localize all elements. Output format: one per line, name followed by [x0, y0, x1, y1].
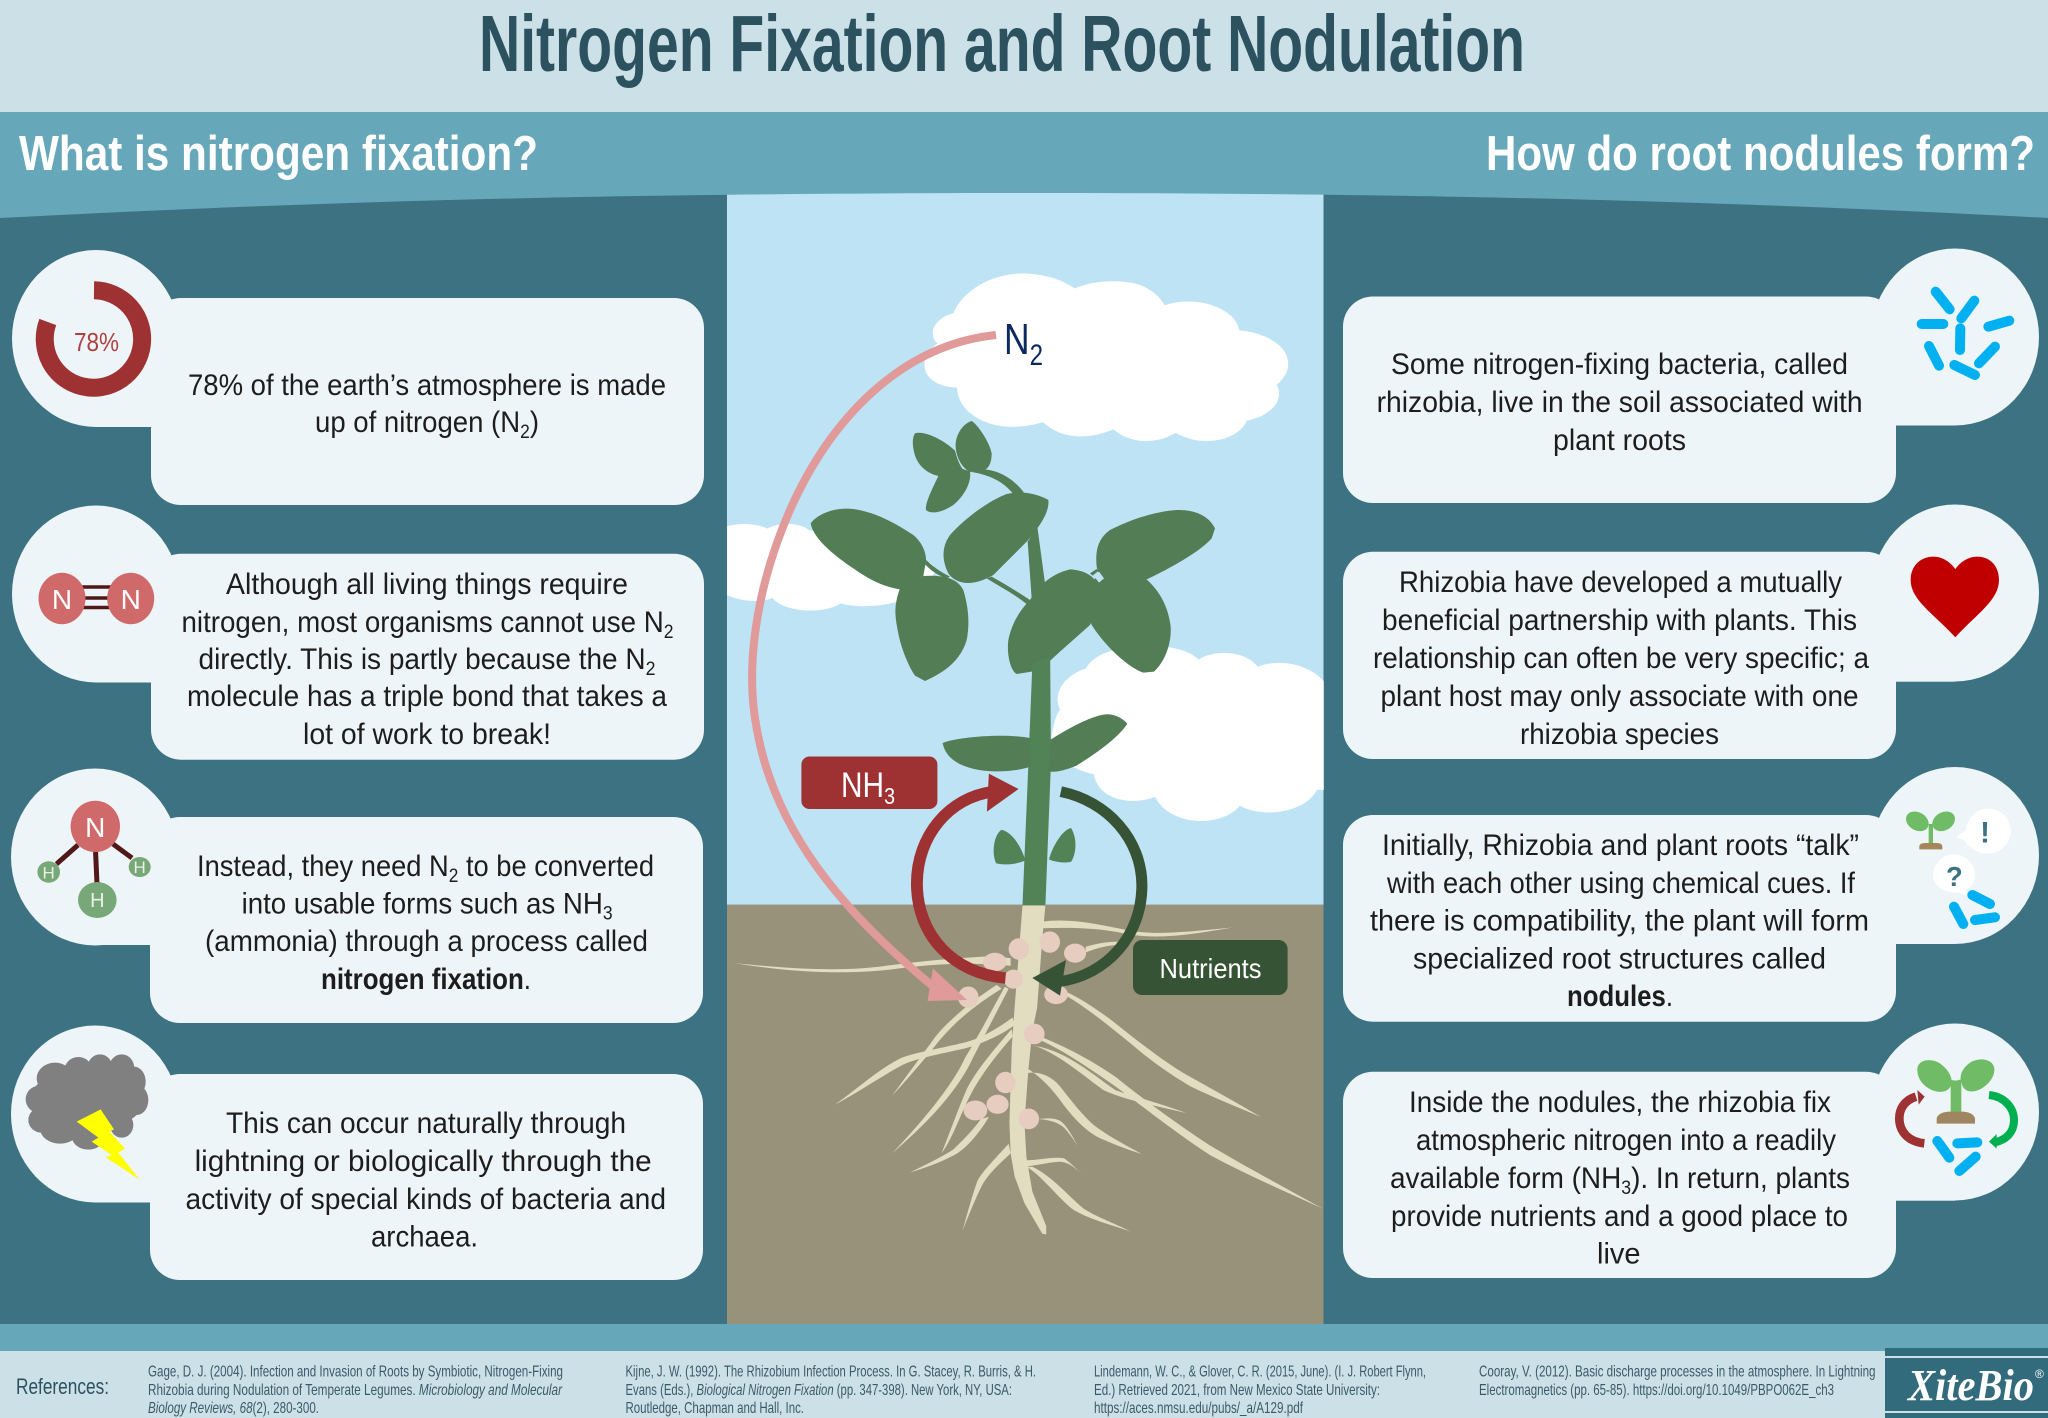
- text block: [182, 568, 674, 751]
- label: NH3: [801, 756, 937, 809]
- text block: Rhizobia have developed a mutually: [1399, 566, 1842, 599]
- text block: 3: [603, 904, 613, 924]
- icon: plant bacteria exchange cycle: [1899, 1059, 2014, 1171]
- reference: Cooray: Cooray, V. (2012). Basic discharge processes in the atmosphere. In Lightning: [1479, 1364, 1876, 1380]
- text block: Some nitrogen-fixing bacteria, called: [1391, 348, 1848, 381]
- text block: rhizobia, live in the soil associated with: [1377, 386, 1863, 419]
- plant lower stem and leaves: [943, 656, 1127, 905]
- label: nutrients: [1133, 940, 1288, 995]
- panel: right card 4: [1343, 1024, 2039, 1278]
- text block: directly. This is partly because the N: [198, 643, 678, 676]
- center scene: sky, soil and plant: [727, 190, 1324, 1325]
- clouds: [727, 274, 1324, 821]
- reference: Lindemann: Lindemann, W. C., & Glover, C. R. (2015, June). (I. J. Robert Flynn,: [1094, 1364, 1426, 1380]
- text block: there is compatibility, the plant will form: [1370, 904, 1869, 938]
- reference: Gage: Biology Reviews, 68(2), 280-300.: [148, 1400, 319, 1417]
- text block: lot of work to break!: [303, 718, 551, 751]
- logo: XiteBio: XiteBio: [1906, 1361, 2034, 1410]
- logo: XiteBio: ®: [2035, 1367, 2044, 1381]
- reference: Kijne: [626, 1364, 1036, 1417]
- text block: Initially, Rhizobia and plant roots “talk”: [1382, 829, 1859, 862]
- icon: rhizobia bacteria: [1922, 292, 2009, 375]
- text block: relationship can often be very specific; a: [1373, 642, 1869, 675]
- icon: storm cloud with lightning: [26, 1054, 148, 1179]
- panel: left card 3: [11, 768, 703, 1023]
- icon: plant and bacteria talking: ?: [1946, 861, 1963, 892]
- arrow: nutrients to roots: [1032, 792, 1142, 996]
- reference: Cooray: Electromagnetics (pp. 65-85). https://doi.org/10.1049/PBPO062E_ch3: [1479, 1382, 1834, 1399]
- card shape: [11, 768, 703, 1023]
- text block: available form (NH: [1390, 1162, 1638, 1195]
- arrow: N2 from air to roots: [752, 335, 996, 1001]
- label: N2: N: [1004, 315, 1036, 364]
- icon: N2 molecule: [38, 573, 154, 624]
- text block: plant host may only associate with one: [1380, 680, 1858, 713]
- card shape: [12, 506, 704, 760]
- text block: atmospheric nitrogen into a readily: [1416, 1124, 1836, 1157]
- text block: activity of special kinds of bacteria and: [186, 1183, 666, 1216]
- icon: NH3 molecule: N: [85, 812, 105, 843]
- icon: NH3 molecule: [37, 801, 151, 918]
- label: nutrients: Nutrients: [1160, 953, 1262, 984]
- text block: to be converted: [458, 850, 654, 883]
- sky: [727, 190, 1324, 905]
- text block: nitrogen, most organisms cannot use N: [182, 606, 703, 639]
- text block: 78% of the earth’s atmosphere is made: [188, 369, 666, 402]
- text block: [1370, 829, 1869, 1013]
- label: NH3: NH: [841, 766, 892, 805]
- text block: 2: [520, 422, 530, 443]
- text block: [197, 850, 654, 996]
- card shape: [12, 250, 704, 505]
- text block: 2: [664, 622, 674, 643]
- text block: provide nutrients and a good place to: [1391, 1200, 1848, 1233]
- card shape: [1343, 1024, 2039, 1278]
- icon: heart: [1911, 557, 1999, 637]
- plant upper stems and leaves: [811, 421, 1215, 681]
- text block: ): [530, 406, 539, 439]
- reference: Gage: [148, 1364, 563, 1417]
- panel: right card 2: [1343, 504, 2039, 759]
- title: Nitrogen Fixation and Root Nodulation: [479, 0, 1525, 88]
- text block: Although all living things require: [226, 568, 628, 601]
- label: NH3: 3: [884, 783, 895, 809]
- panel: left card 2: [12, 506, 704, 760]
- text block: rhizobia species: [1520, 718, 1719, 751]
- card shape: [1343, 248, 2039, 503]
- root nodules: [958, 931, 1086, 1129]
- reference: Cooray: [1479, 1364, 1876, 1399]
- top band with section headings: [0, 112, 2048, 218]
- text block: [1373, 566, 1869, 751]
- text block: This can occur naturally through: [226, 1107, 626, 1140]
- text block: Inside the nodules, the rhizobia fix: [1409, 1086, 1831, 1119]
- label: N2: 2: [1030, 339, 1043, 372]
- footer band: [0, 1324, 2048, 1351]
- text block: (ammonia) through a process called: [205, 925, 648, 958]
- heading: what is nitrogen fixation: What is nitrogen fixation?: [19, 127, 538, 181]
- text block: beneficial partnership with plants. This: [1382, 604, 1857, 637]
- references panel: [0, 1351, 2048, 1418]
- text block: 2: [449, 866, 458, 887]
- icon: N2 molecule: N: [52, 584, 72, 615]
- reference: Lindemann: https://aces.nmsu.edu/pubs/_a/A129.pdf: [1094, 1400, 1303, 1417]
- text block: [1377, 348, 1863, 457]
- logo: XiteBio: [1885, 1348, 2048, 1418]
- text block: 2: [646, 659, 656, 680]
- icon: NH3 molecule: H: [90, 890, 105, 912]
- reference: Gage: Gage, D. J. (2004). Infection and Invasion of Roots by Symbiotic, Nitrogen-Fixing: [148, 1364, 563, 1380]
- panel: right card 3: [1343, 767, 2039, 1022]
- reference: Kijne: Kijne, J. W. (1992). The Rhizobium Infection Process. In G. Stacey, R. Burris, & H.: [626, 1364, 1036, 1380]
- text block: Instead, they need N: [197, 850, 474, 883]
- text block: specialized root structures called: [1413, 942, 1826, 976]
- icon: plant and bacteria talking: !: [1980, 817, 1990, 850]
- reference: Lindemann: Ed.) Retrieved 2021, from New Mexico State University:: [1094, 1382, 1380, 1399]
- text block: with each other using chemical cues. If: [1386, 867, 1856, 900]
- roots: [734, 905, 1323, 1234]
- card shape: [11, 1026, 703, 1280]
- text block: into usable forms such as NH: [242, 888, 633, 920]
- text block: up of nitrogen (N: [315, 406, 538, 439]
- text block: [186, 1107, 666, 1254]
- reference: Lindemann: [1094, 1364, 1426, 1417]
- text block: [188, 369, 666, 443]
- text block: 3: [1621, 1178, 1631, 1199]
- title banner: [0, 0, 2048, 112]
- arrow: NH3 to plant: [917, 774, 1019, 978]
- panel: left card 1: [12, 250, 704, 505]
- card shape: [1343, 504, 2039, 759]
- text block: nitrogen fixation.: [321, 963, 531, 996]
- icon: plant and bacteria talking: [1902, 808, 2011, 924]
- reference: Gage: Rhizobia during Nodulation of Temperate Legumes. Microbiology and Molecular: [148, 1382, 562, 1399]
- text block: nodules.: [1567, 980, 1673, 1013]
- reference: Kijne: Evans (Eds.), Biological Nitrogen Fixation (pp. 347-398). New York, NY, USA:: [626, 1382, 1012, 1399]
- text block: lightning or biologically through the: [195, 1145, 652, 1178]
- icon: NH3 molecule: H: [134, 858, 146, 877]
- card shape: [1343, 767, 2039, 1022]
- panel: left card 4: [11, 1026, 703, 1280]
- icon: 78 percent donut: [45, 290, 142, 388]
- panel: right card 1: [1343, 248, 2039, 503]
- icon: 78 percent donut: 78%: [74, 327, 119, 357]
- text block: molecule has a triple bond that takes a: [187, 680, 667, 713]
- reference: Kijne: Routledge, Chapman and Hall, Inc.: [626, 1400, 804, 1417]
- icon: N2 molecule: N: [121, 584, 141, 615]
- text block: live: [1597, 1238, 1640, 1270]
- references label: References:: [16, 1374, 109, 1399]
- text block: ). In return, plants: [1631, 1162, 1850, 1195]
- text block: [1390, 1086, 1850, 1270]
- text block: plant roots: [1553, 424, 1686, 457]
- icon: NH3 molecule: H: [43, 864, 55, 882]
- soil: [727, 905, 1324, 1325]
- text block: archaea.: [371, 1220, 478, 1254]
